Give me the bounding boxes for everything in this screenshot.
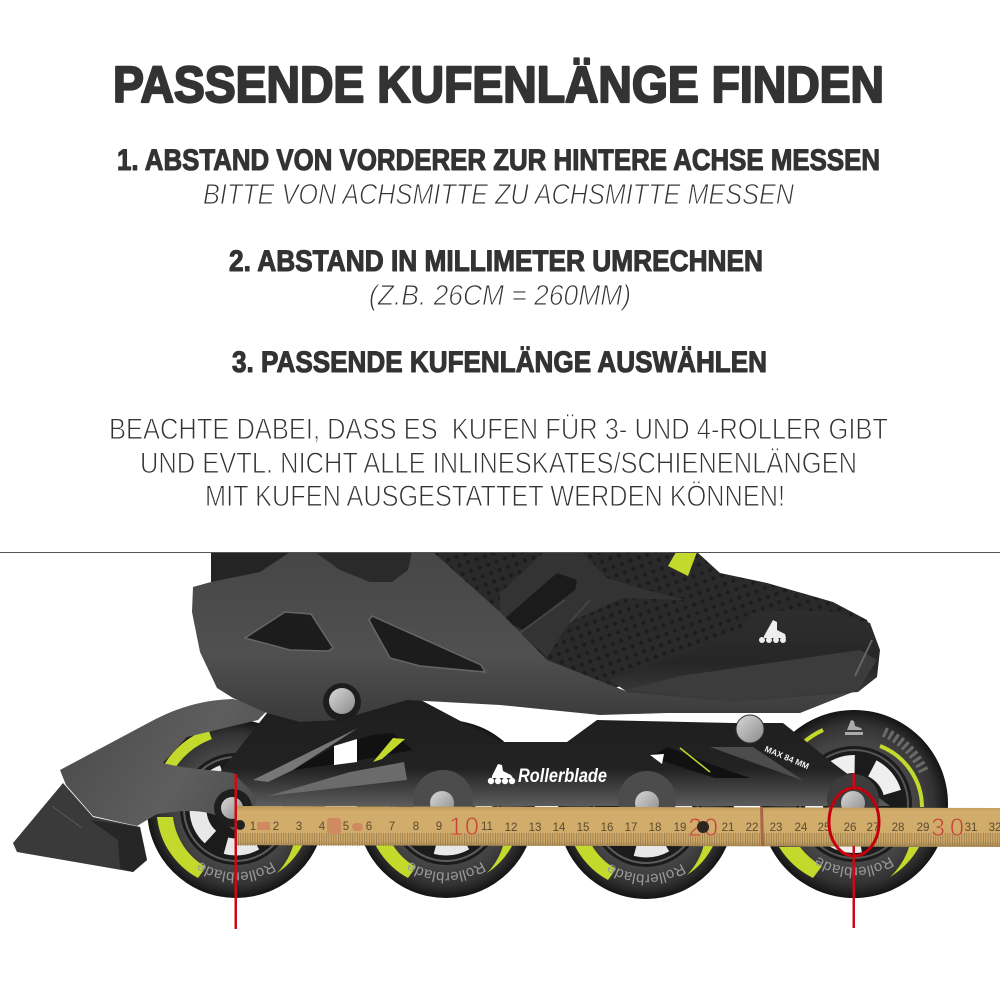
rule numbers: 15: [577, 822, 589, 834]
rivet heel: [323, 683, 361, 721]
heel vent 2: [369, 616, 485, 672]
step 1 heading: 1. ABSTAND VON VORDERER ZUR HINTERE ACHSE MESSEN: [117, 144, 880, 177]
rule numbers: 24: [795, 822, 808, 834]
wheel 1: Rollerblade: [198, 862, 276, 884]
rule numbers: 17: [625, 822, 637, 834]
title: PASSENDE KUFENLÄNGE FINDEN: [113, 56, 884, 113]
rule numbers: 28: [892, 822, 904, 834]
rule numbers: 1: [250, 821, 256, 833]
rule numbers: 30: [931, 814, 969, 842]
rule numbers: 11: [481, 821, 493, 833]
notice text: UND EVTL. NICHT ALLE INLINESKATES/SCHIENENLÄNGEN: [140, 447, 857, 480]
rule numbers: 16: [601, 822, 613, 834]
frame stripe 3: [710, 747, 804, 781]
step 2 heading: 2. ABSTAND IN MILLIMETER UMRECHNEN: [229, 245, 763, 278]
rule numbers: 23: [770, 822, 782, 834]
boot: [192, 552, 880, 743]
max wheel label: MAX 84 MM: [763, 744, 811, 771]
rule stamps: [257, 822, 270, 830]
wheel 4: [760, 710, 948, 898]
rule numbers: 13: [529, 822, 541, 834]
rule numbers: 8: [413, 821, 419, 833]
rule numbers: 25: [818, 822, 830, 834]
wheel 3: Rollerblade: [608, 864, 686, 886]
frame: [220, 698, 890, 830]
side panel: [500, 553, 685, 657]
rule numbers: 18: [649, 822, 661, 834]
rear axle: [214, 789, 252, 827]
frame cut-out with wheel 2: [293, 733, 413, 770]
mesh upper: [211, 552, 876, 690]
toe logo: [759, 620, 786, 643]
folding rule: [235, 806, 1000, 847]
logo: Rollerblade: [488, 764, 607, 787]
rule numbers: [250, 813, 1000, 842]
heel vent 1: [245, 612, 333, 651]
rule numbers: 12: [505, 822, 517, 834]
red marker line rear axle: [234, 774, 237, 929]
rule numbers: 14: [553, 822, 566, 834]
rule numbers: 21: [722, 822, 734, 834]
frame stripe 1: [253, 728, 358, 782]
logo: Rollerblade: Rollerblade: [518, 766, 607, 787]
rule numbers: 19: [674, 822, 686, 834]
rule numbers: 4: [319, 821, 326, 833]
rule end rivet: [235, 820, 245, 830]
rule numbers: 7: [389, 821, 395, 833]
visible axles: [430, 791, 865, 815]
rule numbers: 29: [917, 822, 929, 834]
notice text: MIT KUFEN AUSGESTATTET WERDEN KÖNNEN!: [205, 480, 785, 513]
red marker line front axle: [852, 773, 855, 928]
rule numbers: 10: [449, 813, 481, 841]
rule numbers: 2: [273, 821, 279, 833]
toe bumper: [610, 610, 880, 702]
rule numbers: 9: [436, 821, 442, 833]
rule numbers: 20: [688, 814, 720, 842]
step 2 note: (Z.B. 26CM = 260MM): [369, 280, 631, 312]
wheel 1: [148, 722, 325, 898]
notice text: BEACHTE DABEI, DASS ES KUFEN FÜR 3- UND 4-ROLLER GIBT: [109, 413, 888, 446]
axle bosses: [413, 770, 473, 830]
rule numbers: 22: [746, 822, 758, 834]
rule numbers: 26: [844, 822, 856, 834]
lime lace strap: [668, 552, 697, 576]
frame stripe 2: [268, 762, 407, 796]
photo illustration: inline skate with folding rule: [0, 552, 1000, 929]
brake arm and pad: [13, 699, 270, 872]
step 1 note: BITTE VON ACHSMITTE ZU ACHSMITTE MESSEN: [203, 179, 794, 211]
wheel 4: Rollerblade: [816, 857, 894, 878]
wheel 2: [357, 721, 535, 898]
notice text: [109, 413, 888, 513]
wheel 2: Rollerblade: [408, 862, 486, 884]
heel shell: [192, 552, 858, 722]
frame cut-out near wheel 3: [650, 747, 750, 778]
rule numbers: 5: [343, 821, 349, 833]
horizontal divider: [0, 552, 1000, 553]
rule numbers: 27: [867, 822, 879, 834]
step 3 heading: 3. PASSENDE KUFENLÄNGE AUSWÄHLEN: [232, 346, 767, 379]
red circle around 26: [829, 788, 879, 856]
rule numbers: 31: [965, 822, 977, 834]
top recess: [315, 552, 412, 582]
rule rivet: [697, 821, 709, 833]
wheel 3: [558, 806, 734, 899]
rivet toe: [736, 715, 764, 743]
rule numbers: 3: [296, 821, 302, 833]
rule numbers: 6: [366, 821, 372, 833]
